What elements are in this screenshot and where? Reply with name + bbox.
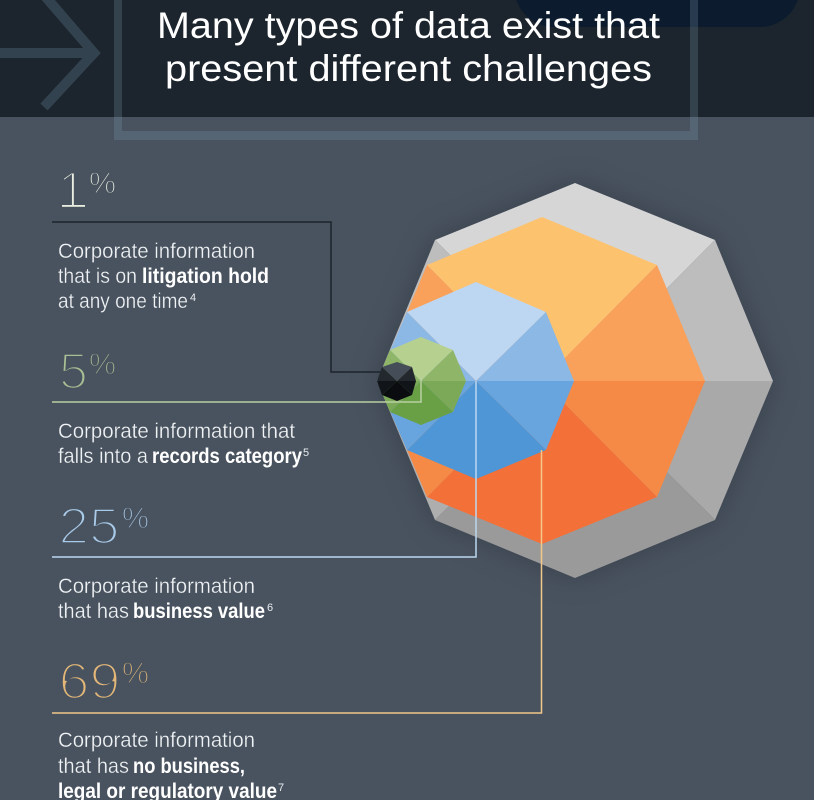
text: 1% description: at any one time (58, 290, 188, 313)
text: 25% description: that has (58, 600, 129, 623)
stat: 1%: % (89, 167, 116, 200)
stat: 5%: 5 (59, 342, 88, 400)
header band (0, 0, 814, 117)
stat: 69%: % (122, 657, 149, 690)
leader line: 5% (52, 378, 421, 402)
text: 5% description: Corporate information that (58, 420, 295, 443)
text: 1% description: 4 (190, 292, 196, 304)
stat: 25%: % (122, 502, 149, 535)
title: present different challenges (165, 48, 652, 89)
title: Many types of data exist that (157, 5, 661, 46)
stat: 5%: % (89, 348, 116, 381)
stat: 5% (59, 342, 116, 400)
text: 1% description: that is on (58, 265, 137, 288)
octagon: 1% litigation hold (black) (377, 362, 416, 401)
title frame (114, 0, 698, 140)
octagon: 5% records (green) (377, 337, 466, 425)
text: 69% description (58, 729, 284, 800)
leader line: 25% (52, 381, 476, 557)
stat: 1%: 1 (58, 162, 86, 218)
text: 69% description: 7 (278, 782, 284, 794)
octagon: all corporate information (grey) (377, 183, 773, 578)
leader line: 69% (52, 450, 542, 713)
text: 5% description (58, 420, 309, 468)
text: 25% description: business value (133, 600, 265, 623)
text: 1% description: litigation hold (142, 265, 269, 288)
stat: 1% (58, 162, 116, 218)
icon: arrow (0, 0, 94, 107)
text: 69% description: no business, (133, 755, 245, 778)
text: 69% description: Corporate information (58, 729, 255, 752)
octagon chart: nested data shares (377, 183, 773, 578)
text: 5% description: falls into a (58, 445, 148, 468)
text: 25% description: 6 (267, 602, 273, 614)
octagon: 25% business value (blue) (377, 282, 574, 479)
text: 25% description (58, 575, 273, 623)
text: 69% description: that has (58, 755, 129, 778)
stat: 25%: 25 (58, 498, 120, 554)
text: 1% description (58, 240, 269, 313)
text: 5% description: 5 (303, 447, 309, 459)
text: 1% description: Corporate information (58, 240, 255, 263)
stat: 25% (58, 498, 149, 554)
stat: 69%: 69 (58, 652, 120, 710)
title (157, 5, 661, 89)
stat: 69% (58, 652, 149, 710)
text: 25% description: Corporate information (58, 575, 255, 598)
text: 5% description: records category (152, 445, 302, 468)
octagon: 69% no value (orange) (378, 217, 705, 544)
leader line: 1% (52, 222, 385, 372)
